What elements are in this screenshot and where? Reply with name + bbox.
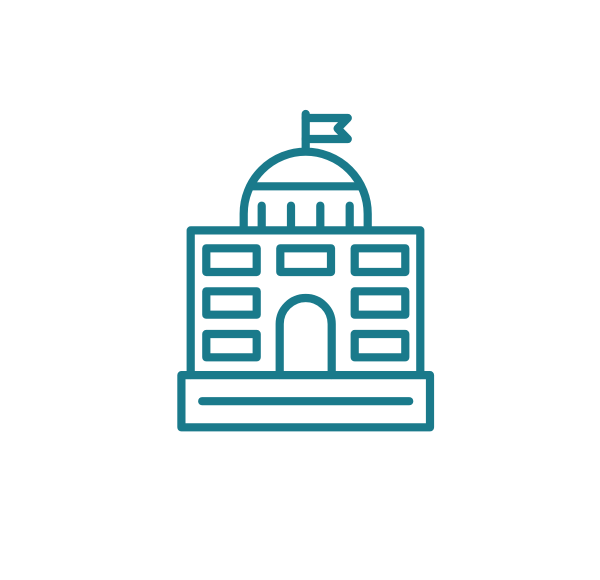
icon: government building xyxy=(181,114,430,427)
building walls xyxy=(191,230,420,375)
base plinth xyxy=(181,375,430,427)
icon: flag xyxy=(306,114,348,151)
door xyxy=(280,298,332,375)
windows xyxy=(206,248,405,357)
icon: dome xyxy=(244,152,368,230)
